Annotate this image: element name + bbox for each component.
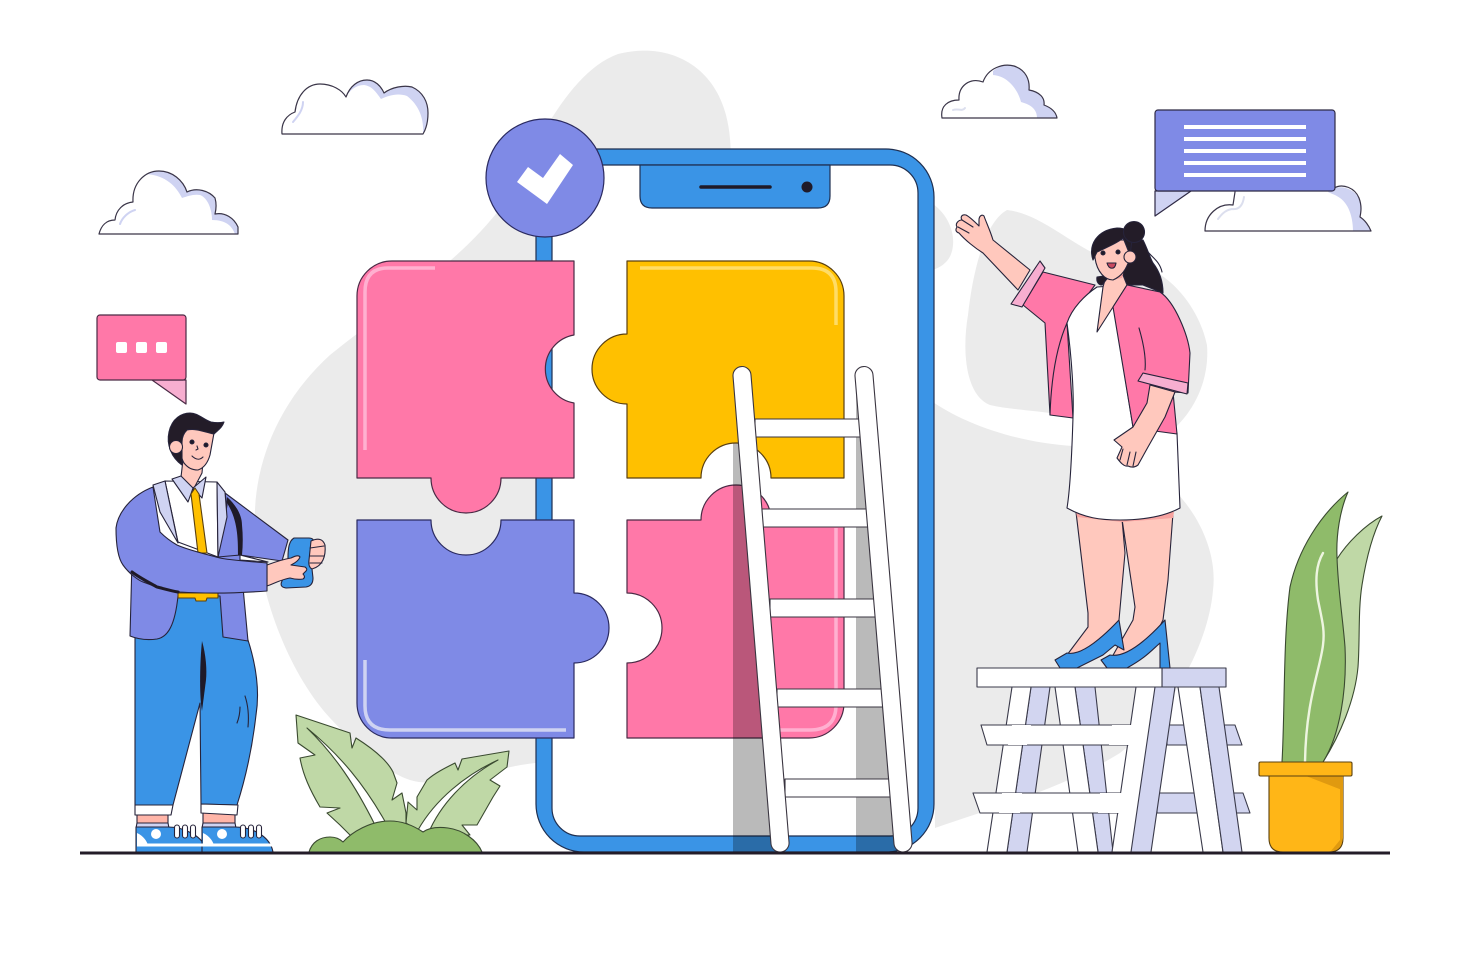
cloud: behind speech bubble <box>1205 184 1371 231</box>
woman: white dress <box>1067 285 1180 520</box>
step stool <box>973 668 1250 852</box>
man: belt <box>178 593 218 601</box>
woman: head <box>1092 222 1144 285</box>
man: head <box>168 413 224 470</box>
woman: left jacket panel <box>1023 272 1095 418</box>
man: trousers <box>135 596 258 805</box>
man: tablet with hands <box>267 538 325 588</box>
check badge <box>486 119 604 237</box>
cloud: top left <box>282 80 428 134</box>
large plant with pot <box>1259 492 1382 852</box>
puzzle piece: bottom left purple <box>357 520 609 738</box>
woman: neckline <box>1097 275 1127 332</box>
woman: right jacket panel <box>1113 285 1190 434</box>
man: near arm <box>116 487 267 593</box>
speech bubble: left with dots <box>97 315 186 404</box>
ladder <box>733 367 912 852</box>
speech bubble: right with text lines <box>1155 110 1335 216</box>
man: jacket back <box>130 555 248 641</box>
man: far arm <box>218 493 288 561</box>
woman: lowered arm <box>1114 385 1175 467</box>
ground line <box>80 852 1390 854</box>
smartphone <box>536 149 934 852</box>
woman: legs <box>1067 512 1125 655</box>
woman: raised arm <box>956 215 1030 290</box>
small plant <box>296 715 509 852</box>
background blobs <box>255 51 1214 828</box>
puzzle piece: top left pink <box>357 261 574 513</box>
puzzle piece: bottom right pink <box>627 485 844 738</box>
woman: far hair <box>1122 240 1163 293</box>
ladder shadow <box>733 375 903 852</box>
man: shoes <box>136 813 273 852</box>
man: cuffs <box>135 804 238 815</box>
man character <box>116 413 325 852</box>
cloud: top right <box>942 65 1057 118</box>
cloud: left <box>99 171 238 234</box>
man: neck and shirt <box>165 481 218 557</box>
woman: shoes <box>1055 620 1124 668</box>
puzzle piece: top right yellow <box>592 261 844 478</box>
woman character <box>956 215 1190 668</box>
